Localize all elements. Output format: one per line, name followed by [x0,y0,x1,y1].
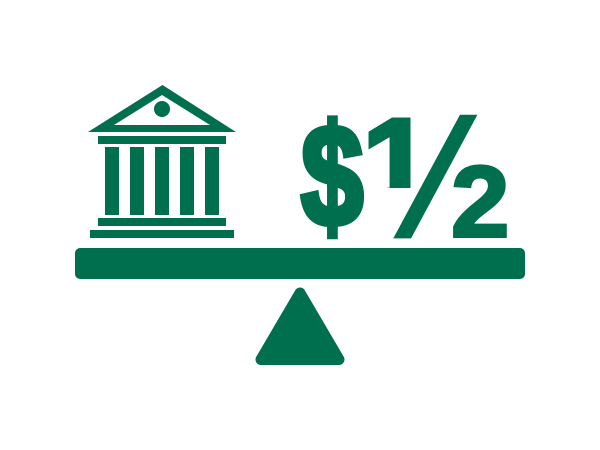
numerator 1: 1 [362,95,433,228]
bank roof pediment [88,85,236,132]
bank upper base [98,218,226,226]
dollar sign: $ [301,96,363,257]
bank entablature [98,136,226,144]
seesaw beam [75,248,525,279]
bank columns [105,147,219,215]
amount: one half dollar [300,114,507,240]
bank lower base [90,230,234,238]
infographic: bank balanced against one half dollar [75,85,525,365]
icon: bank building [88,85,236,238]
fraction slash: / [380,85,490,270]
seesaw fulcrum triangle [261,293,339,360]
denominator 2: 2 [451,145,509,258]
bank roof medallion [154,101,170,117]
